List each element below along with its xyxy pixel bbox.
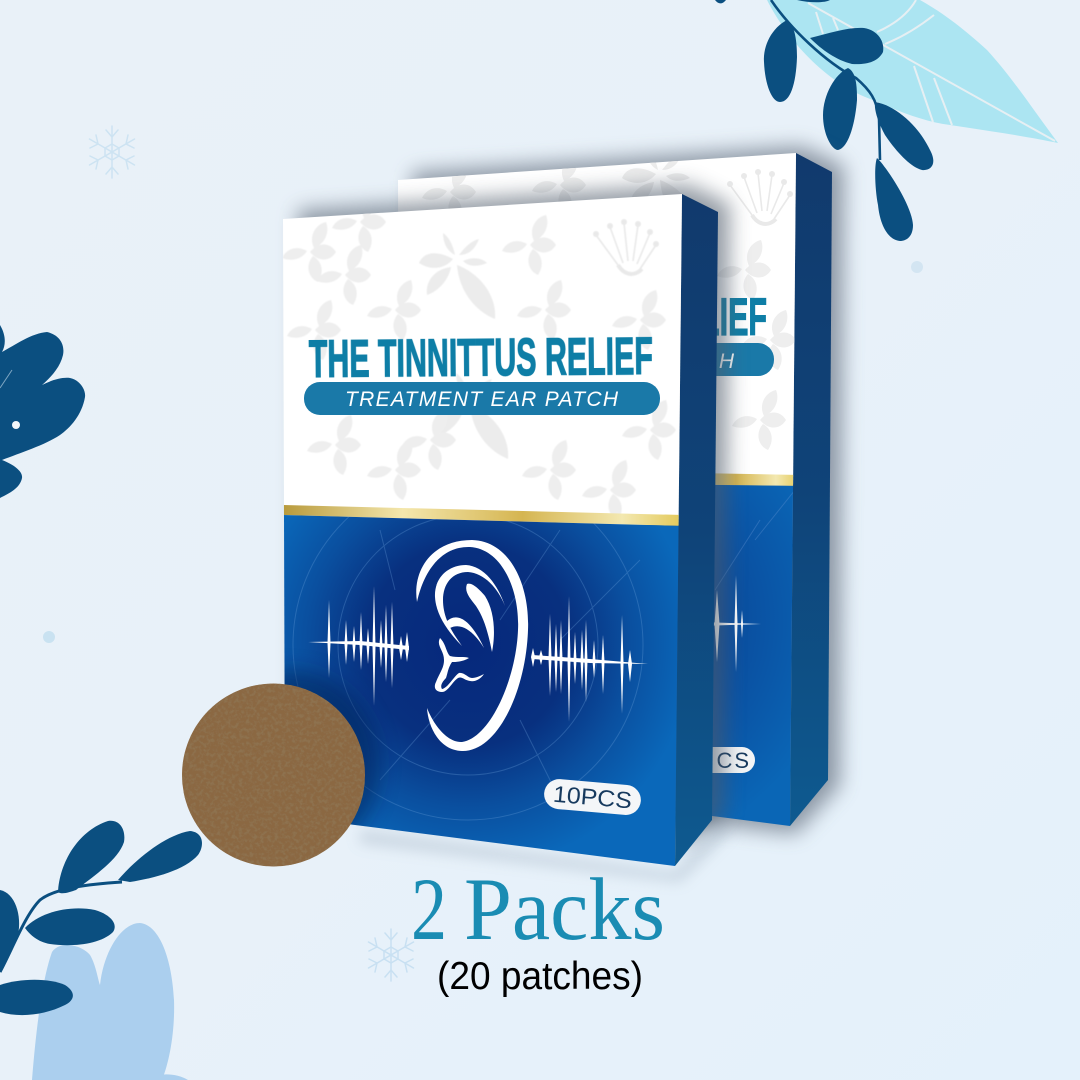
snowflake bottom	[368, 929, 414, 981]
heading: 2 packs: Packs	[464, 861, 665, 959]
front box bottom shadow	[360, 822, 730, 882]
back box waveform	[714, 576, 760, 672]
pale blue plant bottom left	[32, 923, 188, 1080]
leaf sprig top right	[715, 0, 933, 241]
front box side	[675, 194, 718, 866]
subtitle pill	[304, 382, 660, 415]
back box face	[390, 145, 800, 830]
subheading: 20 patches: (20 patches)	[437, 955, 643, 998]
back box title fragment: LIEF	[701, 288, 767, 347]
front box face	[280, 185, 685, 870]
decorative dot right	[911, 261, 923, 273]
floral watermark	[282, 192, 676, 520]
back box pill text fragment: H	[719, 350, 735, 373]
leaf sprig bottom left	[0, 821, 202, 1015]
subtitle pill: TREATMENT EAR PATCH	[345, 388, 619, 411]
count label: 10PCS	[552, 781, 633, 813]
blue lower panel	[283, 515, 682, 870]
back box shadow	[412, 146, 844, 834]
back box pill	[680, 343, 774, 376]
front box shadow	[298, 184, 730, 842]
waveform right	[531, 596, 648, 722]
back box side	[790, 153, 832, 826]
big pale leaf top right	[767, 0, 1058, 143]
product title: THE TINNITTUS RELIEF	[309, 327, 653, 389]
decorative dot left	[43, 631, 55, 643]
leaf cluster left	[0, 325, 85, 498]
waveform left	[308, 586, 409, 706]
gold band	[283, 505, 682, 526]
front product box	[280, 184, 730, 882]
radar rings	[292, 517, 644, 820]
round brown patch	[182, 684, 365, 866]
back product box	[390, 145, 844, 834]
heading: 2 packs: 2	[411, 861, 447, 959]
count label	[543, 778, 642, 816]
ear icon	[416, 540, 528, 751]
patch shadow	[284, 660, 388, 827]
back box count label: CS	[716, 748, 751, 773]
snowflake top left	[90, 126, 134, 178]
